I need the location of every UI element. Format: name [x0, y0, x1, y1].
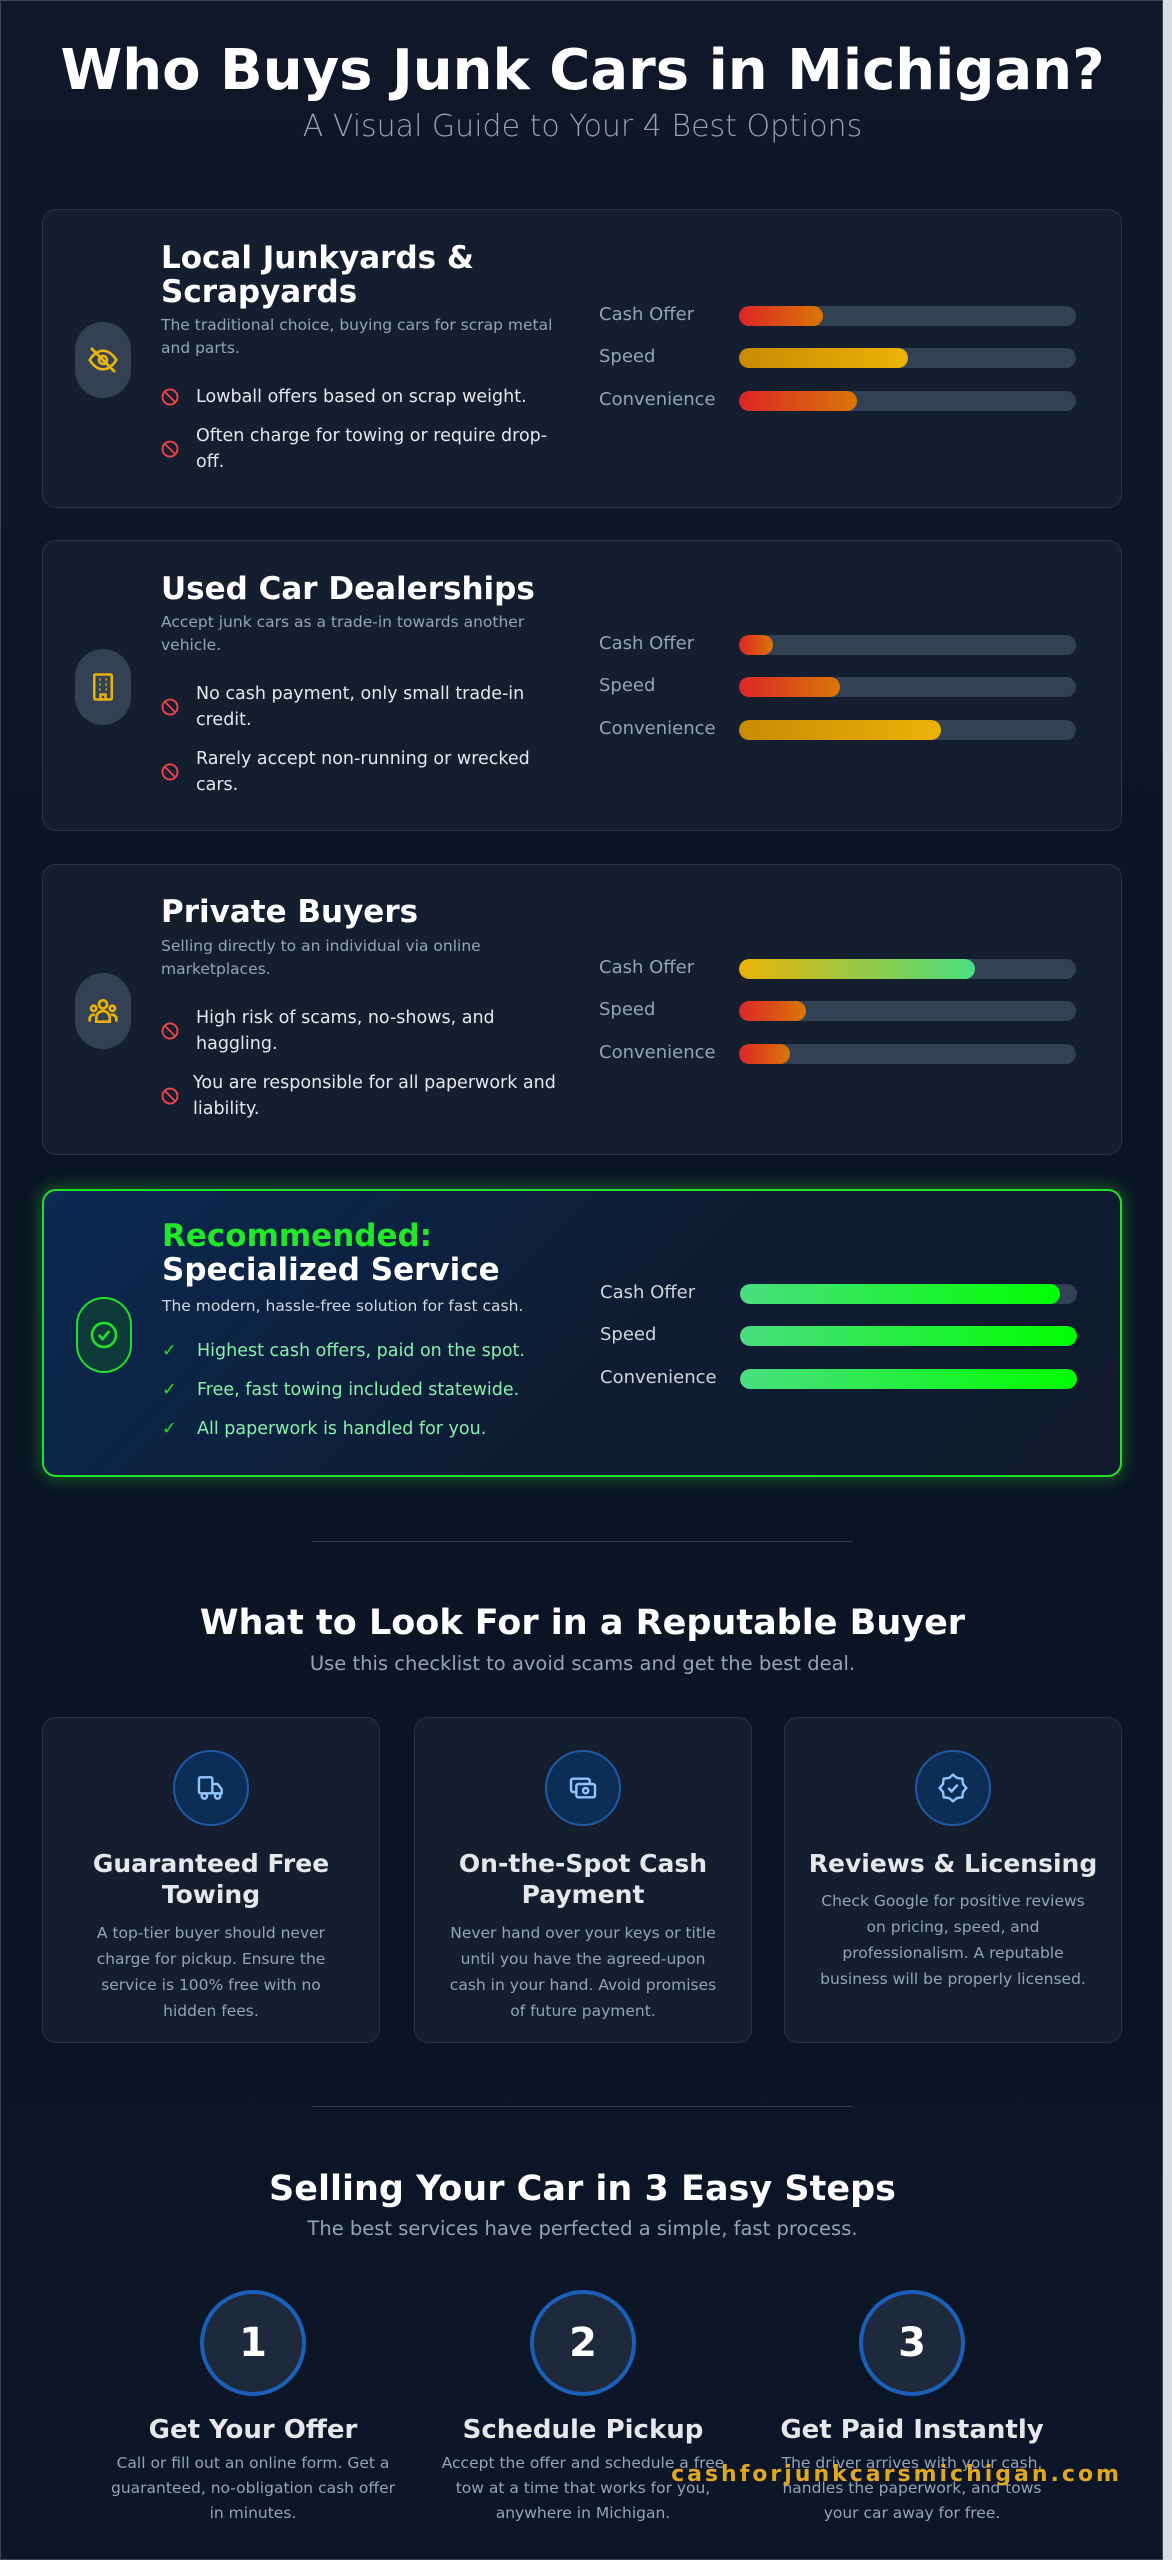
bar chart: Convenience: [599, 718, 716, 739]
step 1: 1: [239, 2320, 267, 2366]
bar chart: Convenience: [599, 389, 716, 410]
bar chart: Cash Offer: [599, 304, 694, 325]
heading: Used Car Dealerships: [161, 571, 535, 607]
panel: reviews: Check Google for positive reviews on pricing, speed, and professionalism. A reputable business will be properly licensed.: [820, 1892, 1086, 1988]
bar chart: Speed: [599, 999, 655, 1020]
step 3: Get Paid Instantly: [780, 2415, 1044, 2445]
subheading: Use this checklist to avoid scams and get the best deal.: [310, 1652, 855, 1675]
icon: users: [75, 973, 131, 1049]
bullet: Rarely accept non-running or wrecked cars.: [196, 749, 530, 795]
step 2: 2: [569, 2320, 597, 2366]
bullet: towing: Often charge for towing or require drop-off.: [196, 426, 547, 472]
bullet: lowball: Lowball offers based on scrap weight.: [196, 387, 527, 407]
panel: cash payment: On-the-Spot Cash Payment: [459, 1849, 707, 1909]
panel: reviews: Reviews & Licensing: [809, 1849, 1097, 1878]
icon: check circle: [76, 1297, 132, 1373]
bar chart: [599, 633, 1076, 740]
heading: Recommended:: [162, 1218, 432, 1254]
checklist: [162, 1341, 525, 1439]
panel: cash payment: [414, 1717, 752, 2043]
description: The traditional choice, buying cars for scrap metal and parts.: [161, 316, 552, 357]
bar chart: Speed: [599, 346, 655, 367]
icon: building: [75, 649, 131, 725]
bar chart: Speed: [599, 675, 655, 696]
checklist: Free, fast towing included statewide.: [197, 1380, 519, 1400]
panel: recommended specialized service: [42, 1189, 1122, 1477]
panel: free towing: [42, 1717, 380, 2043]
panel: reviews: [784, 1717, 1122, 2043]
bar chart: [599, 304, 1076, 411]
title: Who Buys Junk Cars in Michigan?: [60, 38, 1105, 103]
icon: eye off: [75, 322, 131, 398]
checklist: ✓: [162, 1380, 177, 1400]
icon: badge check: [915, 1750, 991, 1826]
subheading: The best services have perfected a simple, fast process.: [307, 2217, 858, 2240]
heading: Specialized Service: [162, 1252, 500, 1288]
bar chart: Cash Offer: [599, 633, 694, 654]
panel: local junkyards: [42, 209, 1122, 508]
bullet: You are responsible for all paperwork and liability.: [193, 1073, 556, 1119]
step 3: [780, 2290, 1044, 2522]
subtitle: A Visual Guide to Your 4 Best Options: [303, 109, 862, 144]
icon: truck: [173, 1750, 249, 1826]
heading: reputable buyer: What to Look For in a Reputable Buyer: [200, 1603, 965, 1643]
checklist: All paperwork is handled for you.: [197, 1419, 486, 1439]
step 1: Get Your Offer: [149, 2415, 357, 2445]
step 3: 3: [898, 2320, 926, 2366]
bar chart: Speed: [600, 1324, 656, 1345]
heading: [162, 1218, 500, 1288]
panel: dealerships: [42, 540, 1122, 831]
step 1: [111, 2290, 395, 2522]
footer url: cashforjunkcarsmichigan.com: [671, 2462, 1122, 2487]
description: The modern, hassle-free solution for fast cash.: [162, 1297, 523, 1315]
bar chart: [599, 957, 1076, 1064]
heading: Private Buyers: [161, 894, 418, 930]
checklist: ✓: [162, 1419, 177, 1439]
bullet: No cash payment, only small trade-in credit.: [196, 684, 524, 730]
step 2: [442, 2290, 724, 2522]
panel: free towing: Guaranteed Free Towing: [93, 1849, 329, 1909]
heading: steps: Selling Your Car in 3 Easy Steps: [269, 2169, 896, 2209]
checklist: Highest cash offers, paid on the spot.: [197, 1341, 525, 1361]
bar chart: Cash Offer: [600, 1282, 695, 1303]
bullet: High risk of scams, no-shows, and haggling.: [196, 1008, 495, 1054]
step 3: The driver arrives with your cash, handles the paperwork, and tows your car away for free.: [782, 2454, 1042, 2522]
step 2: Accept the offer and schedule a free tow at a time that works for you, anywhere in Michigan.: [442, 2454, 724, 2522]
checklist: ✓: [162, 1341, 177, 1361]
panel: private buyers: [42, 864, 1122, 1155]
icon: cash: [545, 1750, 621, 1826]
step 2: Schedule Pickup: [463, 2415, 703, 2445]
description: Accept junk cars as a trade-in towards another vehicle.: [161, 613, 524, 654]
panel: free towing: A top-tier buyer should never charge for pickup. Ensure the service is 100% free with no hidden fees.: [97, 1924, 325, 2020]
step 1: Call or fill out an online form. Get a guaranteed, no-obligation cash offer in minutes.: [111, 2454, 395, 2522]
panel: cash payment: Never hand over your keys or title until you have the agreed-upon cash in your hand. Avoid promises of future payment.: [450, 1924, 716, 2020]
bar chart: Cash Offer: [599, 957, 694, 978]
bar chart: Convenience: [600, 1367, 717, 1388]
bar chart: [600, 1282, 1077, 1389]
description: Selling directly to an individual via online marketplaces.: [161, 937, 481, 978]
heading: Local Junkyards & Scrapyards: [161, 240, 474, 310]
bar chart: Convenience: [599, 1042, 716, 1063]
